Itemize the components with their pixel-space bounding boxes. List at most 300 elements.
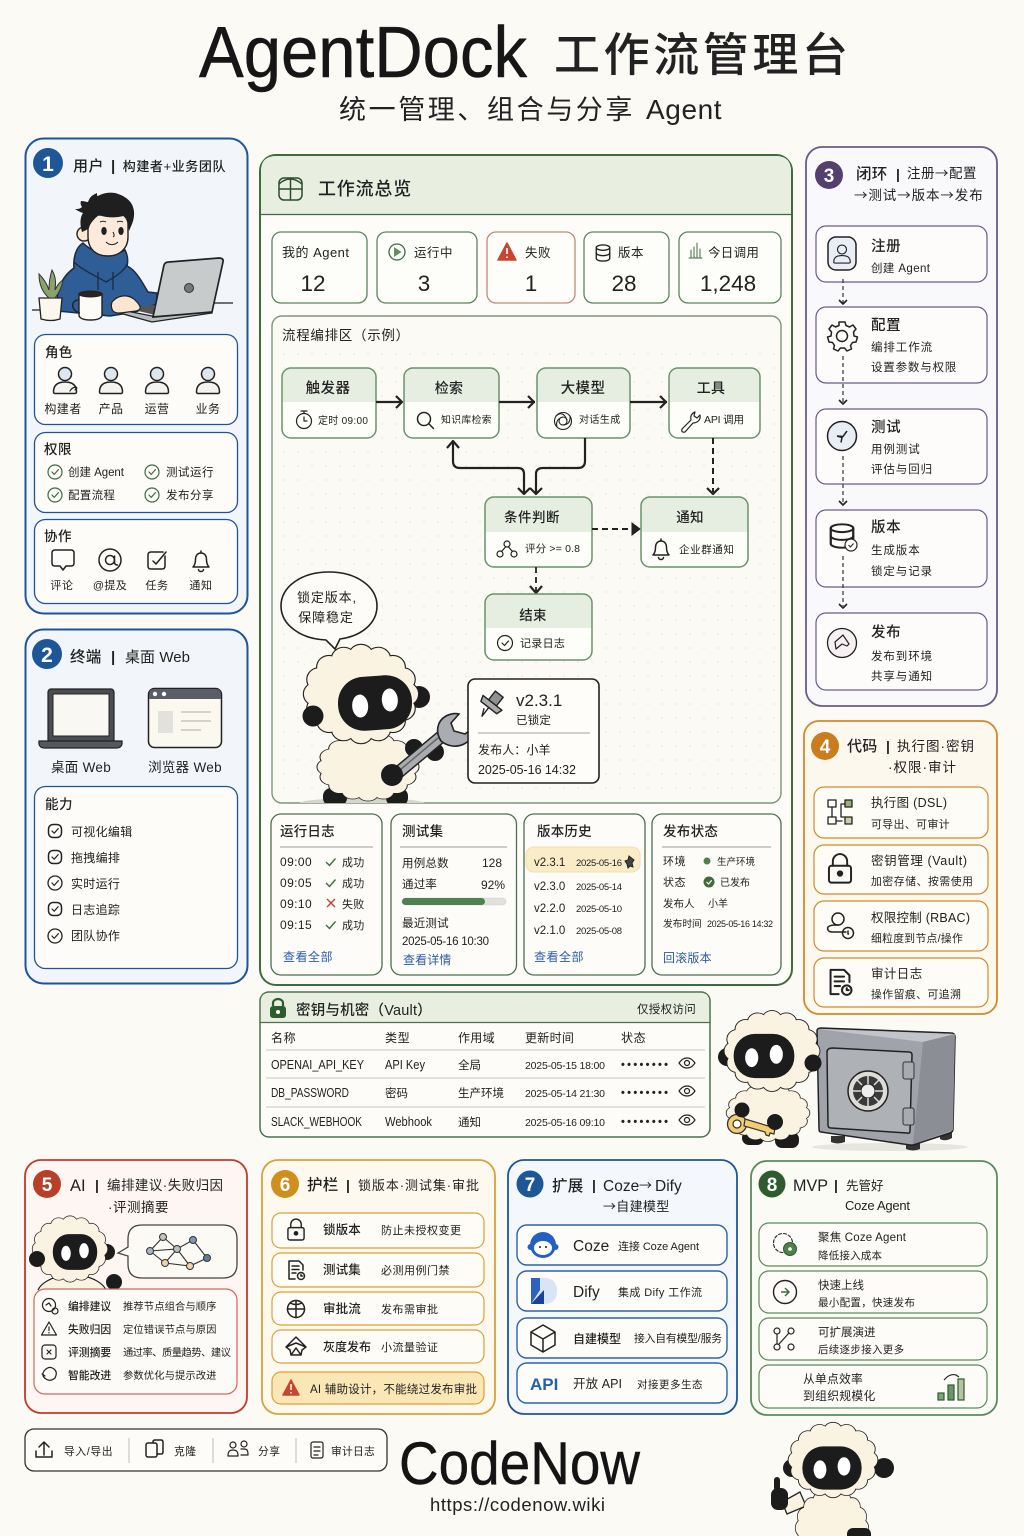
illustration: safe — [812, 1028, 968, 1151]
sub-panel: roles: 构建者 — [44, 401, 82, 416]
card: test set: 测试集 — [402, 824, 444, 839]
arrow: condition to end — [530, 567, 542, 593]
node: retrieval: 检索 — [435, 380, 463, 396]
heading: MVP: | — [834, 1177, 838, 1193]
badge 1 — [33, 148, 63, 178]
card: locked version: 发布人：小羊 — [478, 742, 551, 757]
sub-panel: collaboration — [34, 520, 238, 604]
sub-panel: AI capabilities: 定位错误节点与原因 — [123, 1323, 217, 1336]
row: extensible: 可扩展演进 — [818, 1325, 876, 1339]
table row: openai key: API Key — [385, 1058, 426, 1072]
badge 8 — [758, 1170, 786, 1198]
card: publish status: 生产环境 — [717, 856, 756, 868]
card: locked version: 2025-05-16 14:32 — [478, 763, 576, 777]
callout: speech bubble: 保障稳定 — [298, 610, 354, 625]
node: tool: API 调用 — [704, 414, 744, 426]
sub-panel: roles: 产品 — [99, 402, 123, 416]
heading: extensions: 扩展 — [552, 1177, 584, 1195]
sub-panel: permissions — [34, 432, 238, 512]
table row: openai key: OPENAI_API_KEY — [271, 1058, 365, 1072]
row: canary: 小流量验证 — [381, 1340, 438, 1354]
header band — [261, 156, 791, 214]
sub-panel: permissions: 配置流程 — [68, 488, 115, 502]
mascot: sheep with wrench — [300, 645, 473, 808]
text: share: 分享 — [258, 1444, 280, 1458]
card: version history — [524, 814, 645, 975]
badge 2: 2 — [41, 644, 53, 667]
table row: db password: 密码 — [385, 1086, 408, 1100]
stat: failed: 1 — [525, 271, 537, 296]
panel 1: users — [26, 138, 248, 614]
row: launch fast: 最小配置，快速发布 — [818, 1296, 915, 1309]
row: self-hosted model — [517, 1318, 727, 1358]
row: launch fast — [759, 1271, 987, 1313]
sub-panel: AI capabilities: 参数优化与提示改进 — [123, 1369, 217, 1382]
card: test set — [391, 814, 516, 975]
card: run log: 成功 — [342, 919, 365, 932]
heading: extensions: Coze — [603, 1178, 639, 1195]
icon: clone — [146, 1440, 163, 1457]
table row: slack webhook: 2025-05-16 09:10 — [525, 1117, 605, 1129]
sub-panel: collaboration: 任务 — [145, 579, 169, 592]
row: open API: 开放 API — [573, 1376, 622, 1391]
row: execution graph: 可导出、可审计 — [871, 817, 950, 831]
sub-panel: AI capabilities — [34, 1289, 237, 1394]
badge 5 — [33, 1170, 61, 1198]
card: version history: v2.1.0 — [534, 925, 565, 937]
node: trigger: 定时 09:00 — [318, 414, 368, 427]
row: audit log: 操作留痕、可追溯 — [871, 987, 961, 1001]
card: publish status: 环境 — [663, 854, 686, 868]
card: run log: 09:00 — [280, 855, 312, 869]
icon: upload — [36, 1442, 52, 1457]
step: register — [816, 226, 987, 282]
node: large model: 对话生成 — [579, 413, 621, 426]
row: launch fast: 快速上线 — [818, 1278, 864, 1292]
heading: terminals — [70, 648, 190, 666]
table row: slack webhook: Webhook — [385, 1115, 433, 1129]
row: approval — [272, 1292, 484, 1325]
node: retrieval: 知识库检索 — [441, 413, 492, 426]
card: version history: 版本历史 — [537, 824, 592, 839]
table row: db password: DB_PASSWORD — [271, 1086, 349, 1100]
panel 6: guardrails — [262, 1160, 495, 1414]
stat: my agents — [272, 232, 367, 303]
sub-panel: roles: 角色 — [45, 344, 73, 360]
icon: workflow — [279, 178, 302, 200]
sub-panel: AI capabilities: 评测摘要 — [68, 1345, 111, 1359]
node: tool — [669, 368, 760, 438]
title — [199, 13, 852, 93]
row: Dify: 集成 Dify 工作流 — [618, 1285, 702, 1299]
card: test set: 通过率 — [402, 877, 437, 891]
row: Coze: 连接 Coze Agent — [618, 1240, 699, 1253]
brand url: https://codenow.wiki — [430, 1494, 605, 1515]
step: publish: 发布 — [871, 624, 901, 641]
canvas: flow orchestration — [272, 316, 781, 803]
sub-panel: collaboration: 评论 — [50, 578, 74, 592]
arrow: tool to notify — [707, 438, 719, 494]
card: version history: v2.2.0 — [534, 903, 565, 915]
title: AgentDock — [199, 13, 528, 93]
row: Dify: Dify — [573, 1284, 600, 1301]
card: publish status — [652, 814, 781, 975]
row: canary: 灰度发布 — [323, 1339, 371, 1354]
sub-panel: AI capabilities: 失败归因 — [68, 1322, 111, 1336]
heading: code — [847, 738, 975, 775]
heading: closed loop: | — [896, 166, 900, 182]
text: clone: 克隆 — [174, 1444, 196, 1458]
heading: workflow overview: 工作流总览 — [318, 179, 412, 199]
card: version history: 查看全部 — [534, 949, 584, 964]
badge 3: 3 — [824, 166, 834, 187]
badge 3 — [815, 161, 843, 189]
stat: failed: 失败 — [525, 245, 551, 260]
card: run log: 成功 — [342, 877, 365, 890]
heading: MVP — [793, 1177, 910, 1213]
toolbar: actions — [25, 1429, 387, 1471]
badge 2 — [32, 639, 62, 669]
table columns: 状态 — [621, 1031, 646, 1045]
panel 2: terminals — [26, 630, 248, 984]
table row: db password: 2025-05-14 21:30 — [525, 1088, 605, 1100]
row: scale up — [759, 1365, 987, 1408]
badge 4: 4 — [820, 737, 831, 758]
node: trigger — [282, 368, 376, 438]
heading: code: 执行图·密钥 — [897, 738, 975, 754]
table row: slack webhook: •••••••• — [621, 1116, 668, 1128]
heading: vault: 密钥与机密（Vault） — [296, 1001, 432, 1019]
callout: speech bubble — [281, 572, 377, 649]
sub-panel: capabilities: 团队协作 — [71, 928, 120, 943]
node: retrieval — [404, 368, 499, 438]
row: test set — [272, 1253, 484, 1287]
heading: MVP: Coze Agent — [845, 1198, 910, 1213]
row: focus on Coze Agent: 聚焦 Coze Agent — [818, 1231, 907, 1244]
heading: AI: AI — [70, 1177, 86, 1195]
card: run log: 09:05 — [280, 876, 312, 890]
step: publish — [816, 613, 987, 690]
card: version history: 2025-05-16 — [576, 858, 622, 869]
row: scale up: 到组织规模化 — [803, 1389, 876, 1403]
icon: laptop — [39, 689, 122, 748]
row: lock version: 锁版本 — [323, 1222, 361, 1237]
arrow: trigger to retrieval — [376, 396, 402, 408]
icon: browser window — [148, 688, 222, 748]
row: test set: 必测用例门禁 — [381, 1263, 450, 1277]
node: condition: 条件判断 — [504, 509, 560, 525]
card: run log: 运行日志 — [280, 824, 335, 839]
stat: running: 运行中 — [414, 245, 453, 260]
card: version history: 2025-05-08 — [576, 926, 622, 937]
badge 6 — [271, 1170, 299, 1198]
card: run log: 查看全部 — [283, 949, 333, 964]
card: publish status: 回滚版本 — [663, 950, 712, 965]
step: test — [816, 409, 987, 484]
heading: guardrails — [307, 1176, 479, 1194]
table row: slack webhook: SLACK_WEBHOOK — [271, 1115, 363, 1129]
table columns: 作用域 — [458, 1031, 495, 1045]
card: test set: 128 — [482, 856, 502, 870]
mascot: sheep head — [29, 1216, 122, 1290]
sub-panel: permissions: 测试运行 — [166, 466, 214, 479]
row: Coze — [517, 1225, 727, 1265]
node: notify: 企业群通知 — [679, 543, 734, 556]
stat: running: 3 — [418, 271, 430, 296]
table row: db password: •••••••• — [621, 1087, 668, 1099]
heading: closed loop: 注册→配置 — [907, 162, 977, 182]
mascot: thumbs up sheep — [771, 1423, 894, 1536]
step: test: 测试 — [871, 419, 901, 436]
heading: closed loop: →测试→版本→发布 — [854, 184, 984, 204]
panel: workflow overview — [260, 155, 792, 985]
stat: versions: 28 — [611, 271, 637, 296]
table row: slack webhook — [271, 1115, 695, 1129]
heading: users: 用户 | 构建者+业务团队 — [73, 158, 226, 175]
card: publish status: 发布人 — [663, 897, 695, 910]
illustration: developer at laptop — [32, 193, 233, 322]
sub-panel: AI capabilities: 智能改进 — [68, 1368, 111, 1382]
row: RBAC: 细粒度到节点/操作 — [871, 931, 963, 945]
panel 5: AI — [25, 1160, 247, 1413]
sub-panel: roles — [34, 334, 238, 424]
row: vault: 密钥管理 (Vault) — [871, 853, 967, 868]
node: condition — [485, 497, 592, 567]
row: test set: 测试集 — [323, 1262, 361, 1277]
arrow: retrieval to model — [499, 396, 535, 408]
step: test: 用例测试 — [871, 442, 921, 456]
warning: AI cannot bypass approval: AI 辅助设计，不能绕过发布审批 — [310, 1382, 478, 1396]
stat: calls today — [679, 232, 781, 303]
sub-panel: permissions: 创建 Agent — [68, 465, 125, 479]
card: version history: v2.3.1 — [534, 857, 565, 869]
node: end — [485, 594, 592, 660]
card: test set: 最近测试 — [402, 917, 449, 930]
label: desktop web: 桌面 Web — [51, 760, 111, 775]
row: RBAC: 权限控制 (RBAC) — [871, 910, 970, 925]
heading: code: | — [886, 738, 890, 754]
stat: versions: 版本 — [618, 246, 644, 260]
card: test set: 2025-05-16 10:30 — [402, 936, 489, 948]
arrow: model to tool — [630, 396, 667, 408]
heading: closed loop: 闭环 — [856, 165, 888, 183]
mascot: sheep with key — [718, 1011, 822, 1148]
node: end: 记录日志 — [520, 637, 565, 650]
sub-panel: collaboration: @提及 — [93, 579, 127, 592]
warning: AI cannot bypass approval — [272, 1372, 484, 1404]
heading: guardrails: 锁版本·测试集·审批 — [358, 1178, 479, 1193]
node: notify — [641, 497, 748, 567]
heading: extensions: Dify — [655, 1178, 682, 1195]
panel 4: code — [804, 721, 997, 1014]
row: vault: 加密存储、按需使用 — [871, 874, 974, 888]
row: focus on Coze Agent: 降低接入成本 — [818, 1249, 882, 1262]
card: test set: 92% — [481, 878, 505, 892]
heading: MVP: 先管好 — [846, 1178, 884, 1193]
badge 7: 7 — [525, 1175, 535, 1196]
panel 3: closed loop — [806, 147, 997, 706]
sub-panel: AI capabilities: 推荐节点组合与顺序 — [123, 1300, 217, 1313]
panel 7: extensions — [508, 1160, 737, 1414]
row: vault — [814, 845, 988, 894]
badge 6: 6 — [280, 1175, 290, 1196]
step: version: 生成版本 — [871, 543, 921, 557]
step: publish: 共享与通知 — [871, 669, 933, 683]
node: tool: 工具 — [697, 380, 725, 396]
step: version: 版本 — [871, 519, 901, 536]
callout: speech bubble: 锁定版本, — [297, 590, 357, 605]
row: execution graph — [814, 787, 988, 838]
badge 5: 5 — [42, 1175, 53, 1196]
card: run log — [271, 814, 382, 975]
heading: AI: | — [95, 1177, 99, 1193]
heading: extensions — [552, 1175, 682, 1215]
badge 7 — [516, 1170, 544, 1198]
arrows: loop steps — [839, 279, 847, 608]
table row: db password: 生产环境 — [458, 1086, 504, 1100]
card: locked version: v2.3.1 — [516, 691, 562, 710]
row: Dify — [517, 1271, 727, 1311]
stat: failed — [487, 232, 575, 303]
card: run log: 09:10 — [280, 897, 312, 911]
heading: AI: ·评测摘要 — [108, 1199, 169, 1215]
row: canary — [272, 1330, 484, 1363]
row: RBAC — [814, 901, 988, 951]
heading: MVP: MVP — [793, 1177, 828, 1195]
text: audit log: 审计日志 — [331, 1444, 375, 1458]
table columns: 类型 — [385, 1031, 410, 1045]
heading: AI — [70, 1177, 223, 1215]
card: version history: 2025-05-14 — [576, 882, 622, 893]
step: configure: 编排工作流 — [871, 340, 933, 354]
subtitle: 统一管理、组合与分享 Agent — [339, 94, 722, 125]
card: publish status: 发布状态 — [663, 823, 718, 839]
row: open API: API — [530, 1375, 558, 1394]
icon: vault lock — [270, 999, 286, 1018]
step: configure: 配置 — [871, 317, 901, 334]
icon: audit document — [311, 1442, 323, 1458]
stat: versions — [584, 232, 669, 303]
card: test set: 查看详情 — [403, 952, 451, 967]
icon: share — [228, 1441, 248, 1456]
table row: db password — [271, 1086, 695, 1100]
row: focus on Coze Agent — [759, 1223, 987, 1266]
stat: running — [377, 232, 477, 303]
row: scale up: 从单点效率 — [803, 1372, 863, 1386]
panel 8: MVP — [751, 1161, 997, 1415]
table columns: 名称 — [271, 1030, 296, 1045]
row: audit log: 审计日志 — [871, 966, 923, 981]
sub-panel: capabilities: 日志追踪 — [71, 902, 120, 917]
arrow: model loop to retrieval and condition — [447, 438, 585, 494]
table row: openai key: 2025-05-15 18:00 — [525, 1060, 605, 1072]
table columns: 更新时间 — [525, 1030, 574, 1045]
heading: extensions: → — [639, 1175, 652, 1194]
row: approval: 审批流 — [323, 1301, 361, 1316]
bubble: node graph — [118, 1225, 237, 1278]
sub-panel: collaboration: 通知 — [189, 578, 213, 592]
canvas: flow orchestration: 流程编排区（示例） — [282, 328, 410, 343]
row: self-hosted model: 接入自有模型/服务 — [634, 1331, 722, 1345]
card: publish status: 已发布 — [720, 876, 750, 889]
row: open API — [517, 1363, 727, 1403]
card: publish status: 状态 — [663, 875, 686, 889]
sub-panel: permissions: 发布分享 — [166, 488, 214, 502]
heading: AI: 编排建议·失败归因 — [107, 1177, 223, 1193]
heading: code: 代码 — [847, 738, 878, 755]
table row: openai key — [271, 1058, 695, 1072]
sub-panel: roles: 业务 — [196, 401, 220, 416]
table row: slack webhook: 通知 — [458, 1115, 481, 1129]
note: authorized access only: 仅授权访问 — [637, 1002, 696, 1016]
heading: terminals: | — [111, 649, 115, 666]
heading: extensions: | — [592, 1177, 596, 1193]
sub-panel: capabilities: 实时运行 — [71, 876, 120, 891]
row: open API: 对接更多生态 — [637, 1378, 703, 1391]
heading: closed loop — [854, 162, 984, 204]
card: locked version: 已锁定 — [516, 713, 551, 727]
step: configure: 设置参数与权限 — [871, 360, 957, 374]
row: Coze: Coze — [573, 1238, 609, 1255]
card: test set: 用例总数 — [402, 856, 449, 870]
step: version: 锁定与记录 — [871, 564, 933, 578]
heading: extensions: →自建模型 — [603, 1196, 670, 1215]
sub-panel: permissions: 权限 — [44, 442, 72, 457]
node: trigger: 触发器 — [306, 380, 350, 397]
step: version — [816, 510, 987, 587]
table row: openai key: 全局 — [458, 1058, 481, 1072]
node: notify: 通知 — [676, 509, 704, 525]
brand: CodeNow: CodeNow — [399, 1430, 641, 1497]
step: register: 注册 — [871, 237, 901, 255]
row: extensible: 后续逐步接入更多 — [818, 1343, 904, 1356]
card: run log: 失败 — [342, 897, 365, 911]
node: large model: 大模型 — [561, 379, 605, 397]
step: test: 评估与回归 — [871, 462, 933, 476]
title: 工作流管理台 — [554, 29, 852, 81]
stat: calls today: 1,248 — [700, 271, 756, 296]
card: version history: v2.3.0 — [534, 881, 565, 893]
node: large model — [537, 368, 630, 438]
node: end: 结束 — [519, 608, 547, 623]
card: version history: 2025-05-10 — [576, 904, 622, 915]
table row: openai key: •••••••• — [621, 1059, 668, 1071]
step: publish: 发布到环境 — [871, 649, 933, 663]
table columns — [266, 1030, 705, 1107]
row: execution graph: 执行图 (DSL) — [871, 796, 947, 810]
heading: guardrails: 护栏 — [307, 1176, 339, 1194]
heading: guardrails: | — [346, 1177, 350, 1193]
arrow: condition to notify — [592, 523, 640, 535]
sub-panel: AI capabilities: 通过率、质量趋势、建议 — [123, 1346, 232, 1359]
step: register: 创建 Agent — [871, 261, 931, 275]
stat: calls today: 今日调用 — [708, 245, 759, 260]
sub-panel: capabilities: 可视化编辑 — [71, 824, 133, 839]
sub-panel: capabilities: 拖拽编排 — [71, 850, 120, 865]
stat: my agents: 12 — [300, 271, 326, 296]
badge 8: 8 — [767, 1175, 777, 1196]
heading: terminals: 桌面 Web — [125, 649, 190, 666]
row: self-hosted model: 自建模型 — [573, 1331, 621, 1346]
heading: code: ·权限·审计 — [888, 759, 957, 775]
row: extensible — [759, 1318, 987, 1360]
sub-panel: roles: 运营 — [145, 402, 169, 416]
node: condition: 评分 >= 0.8 — [525, 543, 580, 555]
card: publish status: 发布时间 — [663, 917, 702, 930]
label: browser web: 浏览器 Web — [148, 760, 222, 775]
badge 1: 1 — [42, 153, 54, 176]
heading: terminals: 终端 — [70, 648, 102, 666]
